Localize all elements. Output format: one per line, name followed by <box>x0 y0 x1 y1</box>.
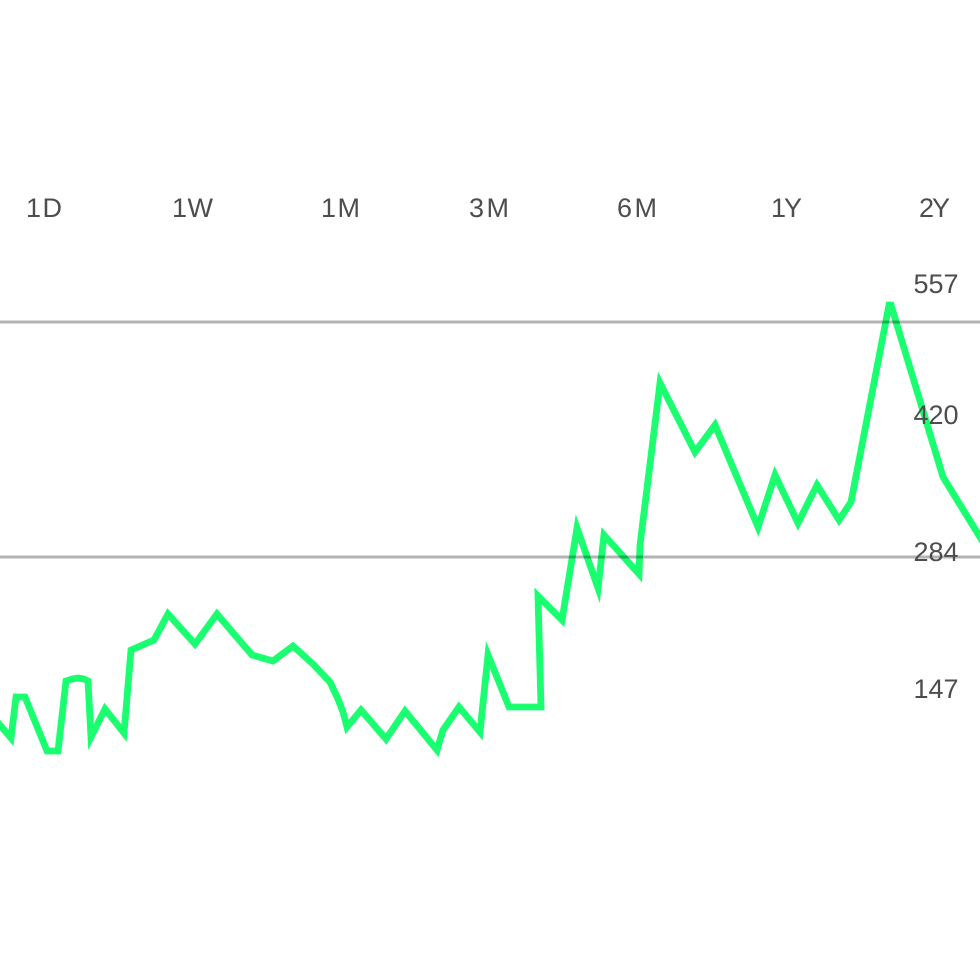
value axis labels: 557 <box>913 269 959 299</box>
time range labels: 2Y <box>919 193 950 223</box>
value axis labels <box>913 269 959 704</box>
horizontal grid lines <box>0 322 980 557</box>
time range labels: 1D <box>26 193 62 223</box>
value axis labels: 147 <box>913 674 959 704</box>
green price line <box>0 305 980 751</box>
time range labels: 1M <box>321 193 360 223</box>
time range labels: 1W <box>172 193 214 223</box>
value axis labels: 420 <box>913 400 959 430</box>
time range labels: 1Y <box>771 193 802 223</box>
time range labels: 6M <box>617 193 657 223</box>
value axis labels: 284 <box>913 537 959 567</box>
time range labels <box>26 193 950 223</box>
time range labels: 3M <box>469 193 509 223</box>
